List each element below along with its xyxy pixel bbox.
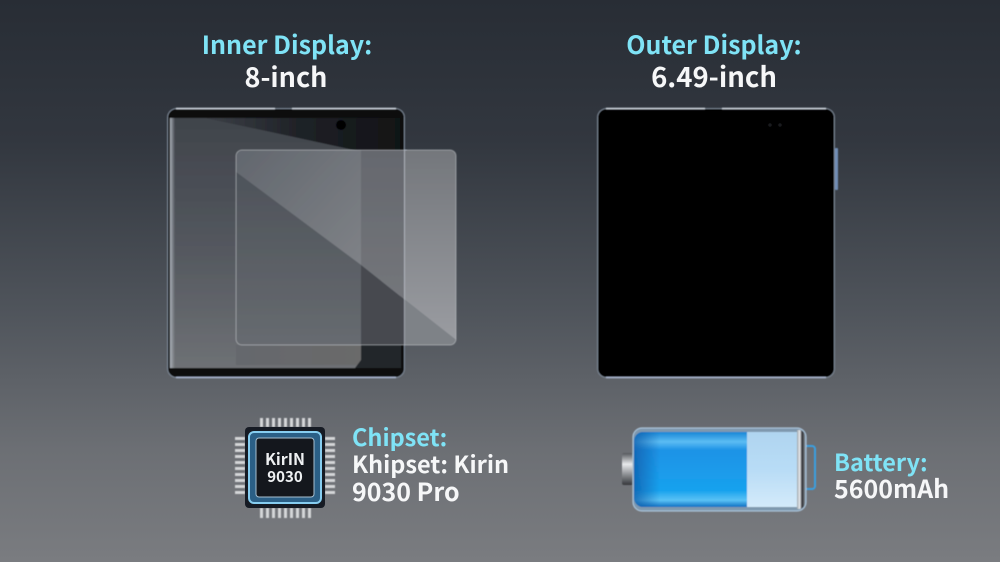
- text: chipset: Khipset: Kirin: [352, 446, 509, 480]
- heading: inner display: 8-inch: [245, 56, 327, 95]
- screen reflection: [170, 111, 401, 376]
- chip label: 9030: [267, 466, 303, 487]
- side buttons: [405, 150, 407, 190]
- light empty part: [747, 432, 797, 507]
- heading: outer display: Outer Display:: [626, 26, 802, 62]
- frame top edge: [176, 108, 396, 110]
- frame bottom edge: [606, 376, 826, 378]
- blue charge: [634, 432, 747, 507]
- heading: outer display: [626, 26, 802, 95]
- chip core: [256, 438, 314, 497]
- frame: [598, 108, 834, 378]
- phone edge through glass: [404, 150, 406, 345]
- right bracket: [806, 446, 815, 489]
- text: chipset: Chipset:: [352, 419, 447, 453]
- panel below diagonal, middle: [361, 265, 405, 345]
- frame top edge: [606, 108, 826, 110]
- battery case: [633, 428, 806, 511]
- phone: inner display with glass panel: [168, 108, 407, 378]
- panel below diagonal, left: [236, 172, 361, 345]
- panel outside phone: [405, 150, 456, 340]
- chip blue ring: [249, 432, 321, 503]
- heading: outer display: 6.49-inch: [651, 55, 777, 95]
- panel corner: [405, 300, 456, 345]
- panel above diagonal, middle: [361, 150, 405, 300]
- icon: battery: [622, 428, 815, 511]
- camera hole: [336, 120, 346, 130]
- panel outline: [236, 150, 456, 345]
- battery terminal: [622, 453, 634, 485]
- heading: inner display: [202, 26, 372, 95]
- phone frame: [168, 108, 404, 378]
- text: battery: 5600mAh: [834, 470, 949, 506]
- side button: [835, 148, 838, 190]
- camera dots: [768, 123, 782, 127]
- chip body: [245, 427, 325, 508]
- chip label: [265, 446, 305, 487]
- metal cap: [797, 430, 805, 509]
- panel above diagonal, left: [236, 150, 361, 265]
- glass panel: [236, 150, 456, 345]
- text: battery: [834, 444, 949, 506]
- text: chipset: [352, 419, 509, 509]
- phone: outer display: [598, 108, 838, 378]
- icon: chipset: [235, 418, 335, 518]
- left shading: [634, 432, 660, 507]
- heading: inner display: Inner Display:: [202, 26, 372, 62]
- chip label: KirIN: [265, 446, 305, 470]
- chip pins: [235, 418, 335, 518]
- text: chipset: 9030 Pro: [352, 473, 460, 509]
- frame bottom edge: [176, 376, 396, 378]
- text: battery: Battery:: [834, 444, 928, 478]
